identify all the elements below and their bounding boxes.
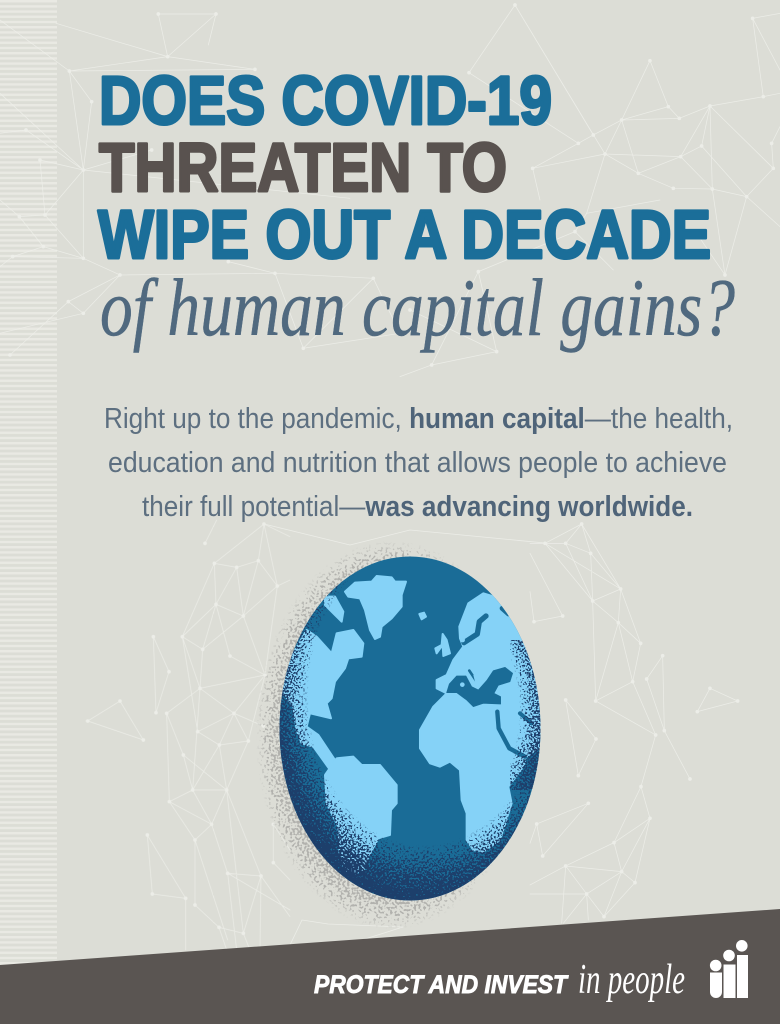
- globe dust shadow: [240, 540, 540, 940]
- globe stippled right rim: [510, 640, 540, 790]
- footer band: [0, 909, 780, 1024]
- footer tagline: [314, 957, 685, 1003]
- title: headline: DOES COVID-19: [99, 62, 552, 139]
- footer tagline: PROTECT AND INVEST: [314, 971, 569, 999]
- footer tagline: in people: [578, 957, 685, 1003]
- globe ocean: [280, 556, 540, 900]
- globe continents: [273, 554, 547, 902]
- intro text block: [104, 403, 733, 523]
- intro text block: Right up to the pandemic, human capital—the health,: [104, 403, 733, 435]
- title: headline: THREATEN TO: [99, 129, 507, 206]
- globe stippled shading: [278, 554, 542, 902]
- globe small light islands: [460, 639, 479, 687]
- icon: globe: [258, 544, 540, 927]
- globe inland seas: [447, 608, 532, 757]
- title: headline: [98, 62, 711, 273]
- intro text block: education and nutrition that allows people to achieve: [108, 447, 727, 479]
- icon: three people logo: [710, 940, 748, 998]
- intro text block: their full potential—was advancing worldwide.: [142, 491, 693, 523]
- left striped band: [0, 0, 57, 1024]
